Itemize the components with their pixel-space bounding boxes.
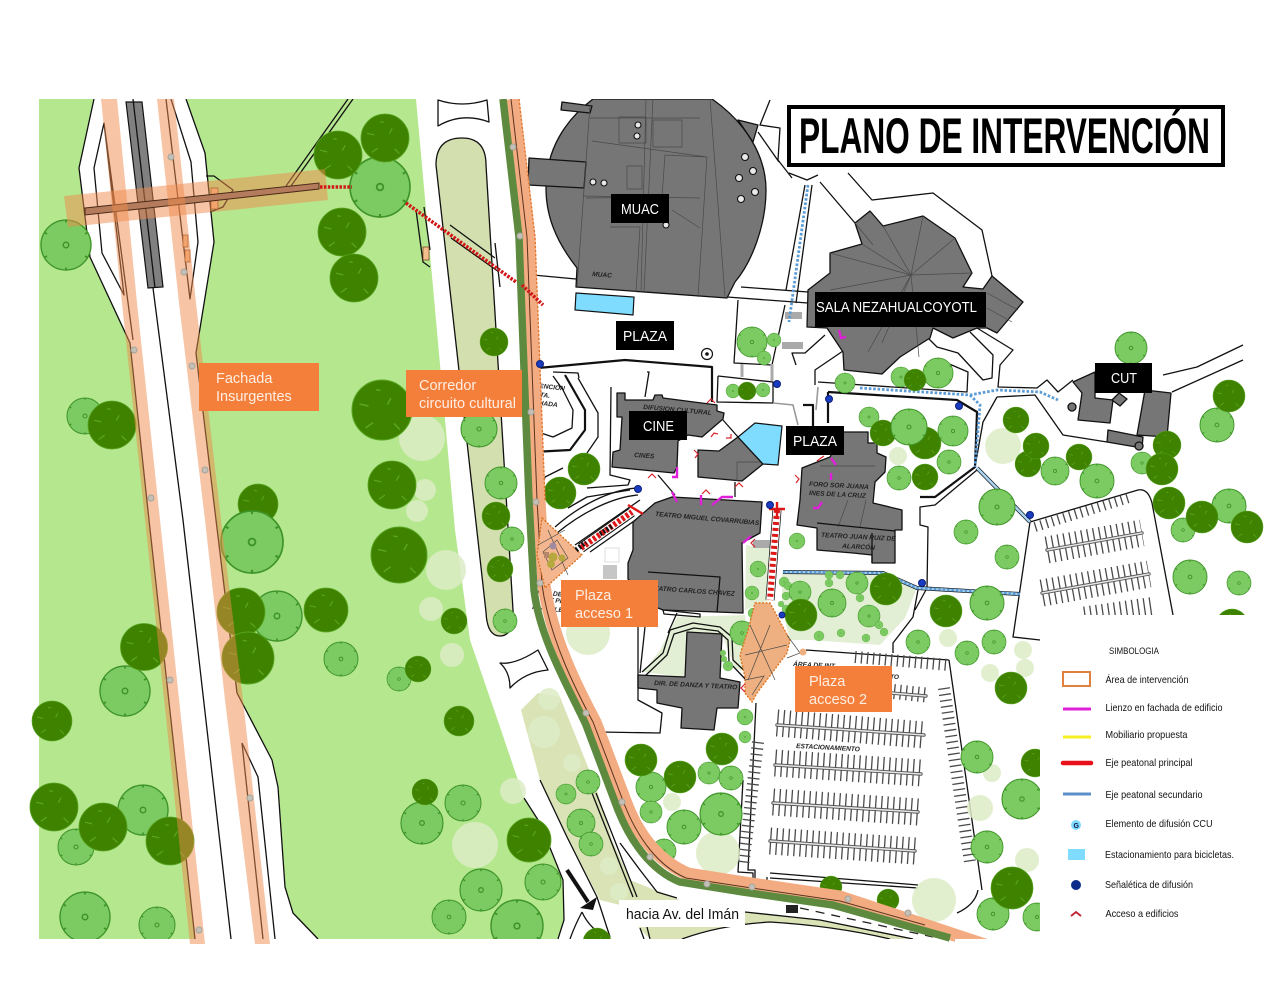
callout: Plaza acceso 2: acceso 2 bbox=[809, 692, 867, 708]
building outlines and paths bbox=[532, 100, 1243, 913]
legend: estacionamiento bicicletas bbox=[1068, 849, 1234, 861]
south road bbox=[540, 780, 933, 939]
legend: area de intervencion: Área de intervención bbox=[1106, 673, 1189, 686]
building: MUAC bbox=[528, 99, 766, 298]
label: CINE: CINE bbox=[643, 418, 674, 435]
building: Foro Sor Juana: INES DE LA CRUZ bbox=[809, 490, 867, 500]
legend: estacionamiento bicicletas: Estacionamiento para bicicletas. bbox=[1105, 849, 1234, 861]
label: PLAZA north: PLAZA bbox=[623, 328, 667, 345]
legend: elemento de difusion bbox=[1071, 818, 1212, 830]
legend: lienzo: Lienzo en fachada de edificio bbox=[1106, 702, 1223, 714]
building: Teatro Miguel Covarrubias bbox=[628, 497, 762, 617]
legend: acceso: Acceso a edificios bbox=[1106, 908, 1178, 920]
building: Cine and Difusion Cultural bbox=[612, 393, 724, 473]
label: CUT bbox=[1095, 363, 1152, 393]
avenida Insurgentes road bbox=[79, 99, 564, 939]
intervention area: Plaza acceso 2 bbox=[740, 603, 806, 702]
building: Danza y Teatro: DIR. DE DANZA Y TEATRO bbox=[654, 680, 738, 691]
bicycle parking MUAC bbox=[575, 293, 634, 315]
callout: Plaza acceso 1: acceso 1 bbox=[575, 606, 633, 622]
label: CINE bbox=[629, 411, 687, 440]
road island bbox=[436, 138, 513, 636]
callout: Plaza acceso 1 bbox=[561, 580, 658, 627]
legend: elemento de difusion: G bbox=[1074, 823, 1080, 830]
callout: Corredor circuito cultural: circuito cultural bbox=[419, 396, 516, 412]
label: CUT: CUT bbox=[1111, 370, 1137, 387]
gray markers bbox=[131, 144, 911, 933]
building: Sala Nezahualcoyotl bbox=[807, 211, 1023, 374]
road shapes bbox=[438, 100, 548, 688]
legend: eje secundario bbox=[1063, 789, 1203, 801]
callout: Plaza acceso 2: Plaza bbox=[809, 674, 846, 690]
parking east bbox=[1035, 497, 1156, 620]
label: MUAC: MUAC bbox=[621, 201, 659, 218]
intervention band: Fachada Insurgentes bbox=[101, 99, 270, 944]
legend: eje secundario: Eje peatonal secundario bbox=[1106, 789, 1203, 801]
transit station bbox=[126, 99, 163, 288]
small map labels: RVENCIÓN bbox=[530, 380, 566, 393]
legend panel bbox=[1040, 615, 1280, 950]
building: Foro Sor Juana bbox=[797, 432, 902, 563]
lawn by danza bbox=[643, 545, 770, 677]
callout: Fachada Insurgentes: Fachada bbox=[216, 371, 273, 387]
building: Cine and Difusion Cultural: CINES bbox=[634, 452, 655, 460]
lawn by theatres bbox=[782, 572, 916, 645]
legend: eje principal: Eje peatonal principal bbox=[1106, 757, 1192, 769]
south island bbox=[521, 693, 913, 939]
building: CUT bbox=[1068, 372, 1171, 450]
building: Teatro Miguel Covarrubias: TEATRO CARLOS CHAVEZ bbox=[650, 585, 736, 598]
legend title: SIMBOLOGIA bbox=[1109, 646, 1160, 657]
building: Teatro Miguel Covarrubias: TEATRO MIGUEL COVARRUBIAS bbox=[655, 511, 760, 527]
label: MUAC bbox=[611, 194, 669, 223]
elemento de difusion plaza bbox=[702, 348, 712, 360]
callout: Corredor circuito cultural: Corredor bbox=[419, 378, 476, 394]
intervention band: Corredor circuito cultural bbox=[503, 99, 985, 945]
callout: Fachada Insurgentes bbox=[199, 363, 319, 411]
arrow toward Av. del Iman bbox=[567, 870, 597, 910]
intervention band: bridge bbox=[64, 169, 328, 227]
legend: area de intervencion bbox=[1063, 672, 1189, 686]
acceso a edificios bbox=[648, 399, 824, 692]
lienzo en fachada bbox=[672, 330, 846, 543]
building: Foro Sor Juana: FORO SOR JUANA bbox=[809, 481, 869, 491]
small map labels: ESTA. bbox=[531, 391, 551, 400]
building: Foro Sor Juana: ALARCÓN bbox=[841, 541, 876, 552]
callout: Corredor circuito cultural bbox=[406, 370, 522, 417]
building: MUAC: MUAC bbox=[592, 271, 612, 280]
walkways secondary bbox=[783, 185, 1058, 594]
señalética de difusión bbox=[536, 360, 1034, 618]
small map labels: TO bbox=[890, 674, 900, 681]
label: hacia Av. del Iman: hacia Av. del Imán bbox=[626, 907, 739, 923]
label: PLAZA central: PLAZA bbox=[793, 433, 837, 450]
legend: mobiliario bbox=[1063, 729, 1188, 741]
legend: acceso bbox=[1071, 908, 1178, 920]
legend: mobiliario: Mobiliario propuesta bbox=[1106, 729, 1188, 741]
small map labels: PLAZOLE bbox=[532, 604, 564, 614]
small map labels bbox=[528, 380, 900, 753]
building: central bbox=[698, 437, 763, 481]
label: PLAZA north bbox=[616, 321, 674, 350]
legend: señaletica bbox=[1071, 879, 1193, 891]
callout: Plaza acceso 2 bbox=[795, 666, 892, 712]
building: Foro Sor Juana: TEATRO JUAN RUIZ DE bbox=[821, 532, 896, 543]
parking west bbox=[743, 657, 970, 867]
small map labels: RBA DE bbox=[537, 589, 563, 599]
label: hacia Av. del Iman bbox=[619, 900, 745, 927]
label: Sala Nezahualcoyotl bbox=[815, 292, 986, 327]
callout: Fachada Insurgentes: Insurgentes bbox=[216, 389, 292, 405]
park lawn bbox=[39, 99, 564, 939]
callout: Plaza acceso 1: Plaza bbox=[575, 588, 612, 604]
label: PLAZA central bbox=[786, 426, 844, 455]
legend: señaletica: Señalética de difusión bbox=[1105, 879, 1193, 891]
legend: eje principal bbox=[1063, 757, 1192, 769]
legend: elemento de difusion: Elemento de difusión CCU bbox=[1106, 818, 1212, 830]
intervention area: Plaza acceso 1 bbox=[537, 518, 582, 588]
bicycle parking plaza bbox=[738, 423, 782, 465]
label: Sala Nezahualcoyotl: SALA NEZAHUALCOYOTL bbox=[816, 299, 977, 316]
small map labels: ACHADA bbox=[528, 399, 558, 409]
small map labels: ESTACIONAMIENTO bbox=[796, 743, 861, 753]
building: Danza y Teatro bbox=[638, 632, 740, 730]
walkway principal: red dashed segments bbox=[320, 187, 785, 600]
small map labels: ÁREA DE INT bbox=[792, 659, 836, 670]
building: Cine and Difusion Cultural: DIFUSION CULTURAL bbox=[643, 404, 712, 417]
small map labels: Y PR bbox=[549, 597, 565, 606]
